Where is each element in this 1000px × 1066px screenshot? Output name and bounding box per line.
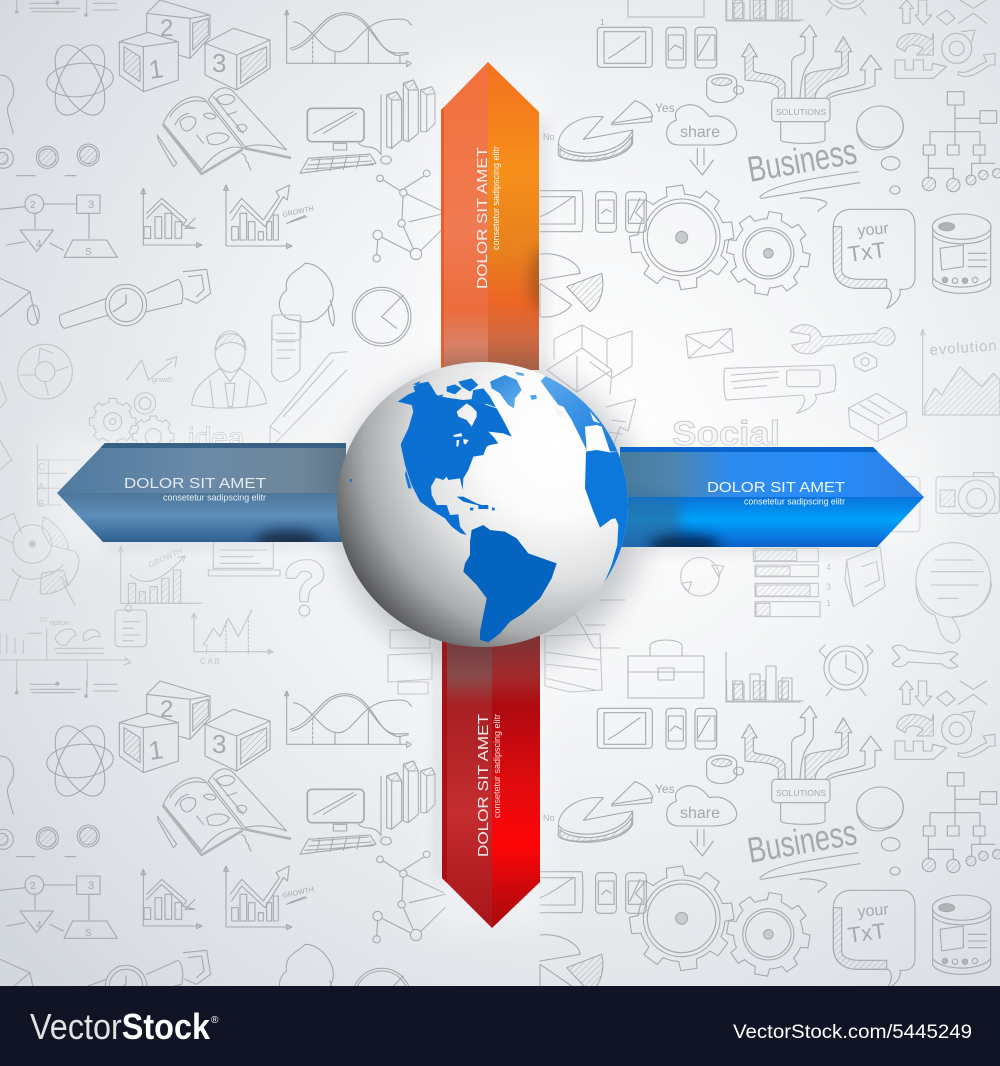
doodle lettering: share: [680, 805, 720, 822]
doodle lettering: GROWTH: [282, 886, 315, 900]
continents: [350, 372, 630, 642]
doodle lettering: 3: [212, 48, 226, 78]
arrow text left: DOLOR SIT AMET: [124, 476, 266, 492]
cuba and caribbean: [457, 497, 495, 510]
doodle lettering: middle band: 02: [40, 617, 48, 624]
doodle lettering: 1: [147, 734, 165, 766]
arrow text left: [124, 476, 266, 504]
doodle lettering: middle band: option: [50, 620, 69, 627]
image id text: VectorStock.com/5445249: [733, 1022, 972, 1043]
doodle lettering: middle band: 1: [826, 598, 831, 608]
arrow text top: [475, 146, 502, 289]
arrow text left: consetetur sadipscing elitr: [163, 492, 266, 504]
iceland: [530, 395, 537, 400]
doodle lettering: 3: [88, 880, 94, 892]
doodle lettering: middle band: C A B: [200, 657, 220, 666]
doodle lettering: middle band: GROWTH: [147, 546, 184, 570]
north america: [398, 382, 512, 535]
footer bar: [0, 986, 1000, 1066]
doodle lettering: 1: [600, 18, 605, 27]
doodle lettering: TxT: [846, 237, 887, 267]
arrow: top orange: [441, 62, 539, 370]
doodle lettering: 1: [147, 53, 165, 85]
brand logo text: VectorStock: [30, 1006, 211, 1047]
doodle band: middle: [0, 315, 1000, 694]
doodle lettering: your: [857, 901, 890, 921]
doodle lettering: TxT: [846, 918, 887, 948]
arrow text bottom: [476, 714, 503, 857]
soft globe shadow: [335, 363, 645, 667]
doodle row: upper band: [0, 0, 1000, 346]
arrow text top: DOLOR SIT AMET: [475, 147, 491, 289]
doodle lettering: middle band: Social: [672, 415, 780, 453]
doodle lettering: middle band: B: [38, 499, 45, 510]
soft halo behind arrows: [40, 60, 940, 930]
south america: [463, 525, 557, 642]
doodle lettering: Business: [744, 130, 860, 190]
doodle lettering: S: [85, 928, 92, 939]
doodle lettering: SOLUTIONS: [776, 107, 826, 117]
doodle lettering: your: [857, 220, 890, 240]
doodle lettering: 2: [30, 200, 36, 211]
doodle lettering: middle band: 4: [826, 562, 831, 572]
soft shadows under arrows: [105, 120, 880, 880]
doodle lettering: GROWTH: [282, 205, 315, 219]
doodle lettering: middle band: evolution: [929, 337, 997, 359]
baja california: [405, 470, 412, 488]
doodle lettering: No: [543, 132, 555, 142]
doodle lettering: middle band: 3: [826, 582, 831, 592]
doodle lettering: 3: [212, 729, 226, 759]
europe and north edge: [515, 372, 623, 452]
arrow body top: [441, 62, 539, 370]
globe sphere: [337, 362, 628, 647]
doodle lettering: S: [85, 247, 92, 258]
arrow text bottom: consetetur sadipscing elitr: [492, 714, 503, 818]
doodle lettering: Yes: [655, 782, 675, 796]
doodle lettering: middle band: growth: [152, 377, 173, 384]
doodle lettering: Business: [744, 811, 860, 871]
arrow text bottom: DOLOR SIT AMET: [476, 714, 492, 857]
doodle lettering: share: [680, 124, 720, 141]
doodle lettering: middle band: A: [38, 482, 45, 493]
doodle lettering: No: [543, 813, 555, 823]
doodle lettering: middle band: C: [38, 462, 45, 473]
arrow: left steel blue: [57, 443, 347, 552]
arrow text top: consetetur sadipscing elitr: [491, 146, 502, 250]
africa: [585, 450, 630, 585]
doodle lettering: SOLUTIONS: [776, 788, 826, 798]
globe: [337, 362, 630, 647]
doodle lettering: [30, 15, 890, 948]
doodle row: fragments above lower repeat: [15, 640, 995, 759]
doodle lettering: middle band: idea: [188, 422, 245, 455]
arctic islands: [413, 378, 496, 407]
doodle lettering: 4: [36, 920, 42, 931]
pacific island: [350, 479, 352, 482]
doodle lettering: 4: [36, 239, 42, 250]
arrow body right: [620, 447, 924, 547]
arrow body left: [57, 443, 347, 552]
doodle lettering: 2: [160, 15, 173, 42]
arrow text right: DOLOR SIT AMET: [707, 480, 845, 496]
arrow: right bright blue: [620, 447, 924, 547]
doodle row: lower repeat: [0, 681, 1000, 1027]
arrow text right: consetetur sadipscing elitr: [744, 496, 845, 508]
doodle lettering: middle band: [38, 337, 997, 666]
registered mark: ®: [211, 1015, 219, 1026]
doodle lettering: Yes: [655, 101, 675, 115]
doodle lettering: 2: [160, 696, 173, 723]
doodle row: wrapped fragments along top edge: [15, 0, 995, 78]
doodle lettering: 3: [88, 199, 94, 211]
arrow text right: [707, 480, 845, 508]
arrow: bottom red: [442, 636, 540, 928]
greenland: [490, 375, 522, 408]
doodle lettering: 2: [30, 881, 36, 892]
british isles and scandinavia gaps: [555, 407, 600, 423]
arrow body bottom: [442, 636, 540, 928]
